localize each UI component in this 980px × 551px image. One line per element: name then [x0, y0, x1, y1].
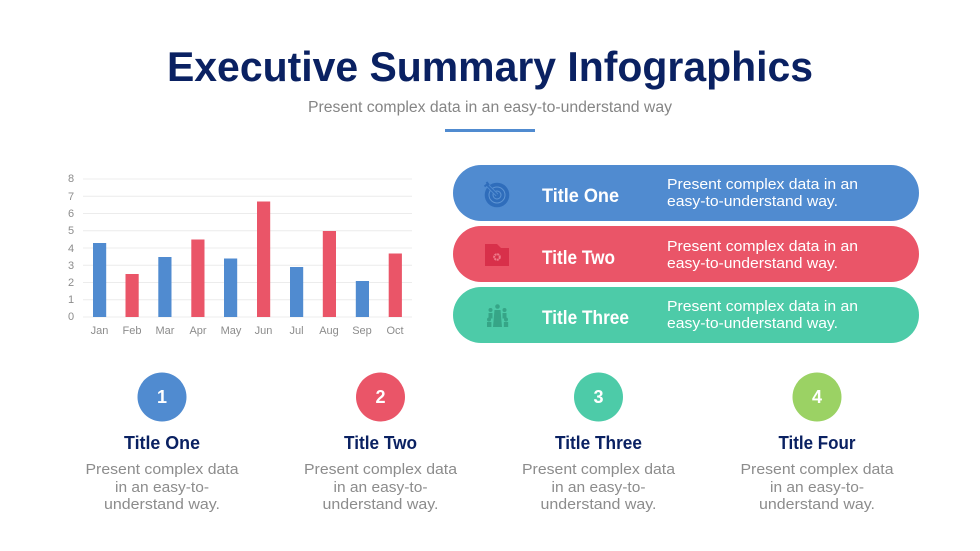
step three text: understand way.: [540, 496, 656, 513]
panel: step three: [522, 372, 676, 513]
step four text: Present complex data: [740, 461, 894, 478]
step two text: in an easy-to-: [334, 479, 428, 496]
number badge 3: 3: [593, 387, 604, 407]
number badge 3: [574, 372, 623, 422]
number badge 4: 4: [812, 387, 822, 407]
x axis labels: Feb: [123, 325, 141, 337]
title underline: [445, 129, 535, 132]
step one text: in an easy-to-: [115, 479, 209, 496]
x axis labels: Aug: [319, 325, 339, 337]
x axis labels: Apr: [189, 325, 207, 337]
step one text: [86, 461, 239, 513]
y axis labels: 1: [68, 294, 74, 306]
title two description: [667, 238, 858, 272]
x axis labels: Mar: [156, 325, 175, 337]
y axis labels: 4: [68, 243, 74, 255]
icon: group of people: [487, 304, 508, 327]
y axis labels: 8: [68, 173, 74, 185]
number badge 1: 1: [157, 387, 167, 407]
y axis labels: 6: [68, 208, 74, 220]
y axis labels: 0: [68, 311, 74, 323]
step four text: understand way.: [759, 496, 875, 513]
x axis labels: Sep: [352, 325, 372, 337]
panel: step one: [86, 372, 239, 513]
step two text: Present complex data: [304, 461, 458, 478]
panel: title two pill: [453, 226, 919, 282]
step three title: Title Three: [555, 433, 642, 453]
title three label: Title Three: [542, 308, 629, 329]
title: Executive Summary Infographics: [167, 43, 813, 90]
x axis labels: Jan: [91, 325, 108, 337]
number badge 2: [356, 372, 405, 422]
step four title: Title Four: [778, 433, 856, 453]
x axis labels: Jul: [289, 325, 304, 337]
title one label: Title One: [542, 186, 619, 207]
step one text: understand way.: [104, 496, 220, 513]
number badge 2: 2: [375, 387, 386, 407]
step three text: [522, 461, 676, 513]
y axis labels: 7: [68, 191, 74, 203]
step four text: [740, 461, 894, 513]
panel: step four: [740, 372, 894, 513]
x axis labels: Oct: [386, 325, 404, 337]
number badge 1: [138, 372, 186, 422]
x axis labels: May: [221, 325, 242, 337]
step one text: Present complex data: [86, 461, 239, 478]
x axis labels: Jun: [255, 325, 272, 337]
step three text: Present complex data: [522, 461, 676, 478]
title two label: Title Two: [542, 248, 615, 269]
title one description: Present complex data in an: [667, 176, 858, 193]
title one description: [667, 176, 858, 210]
x axis labels: [91, 325, 404, 337]
title two description: easy-to-understand way.: [667, 255, 838, 272]
number badge 4: [792, 372, 842, 422]
step two title: Title Two: [344, 433, 417, 453]
y axis labels: 5: [68, 225, 74, 237]
icon: target: [484, 182, 509, 207]
panel: title three pill: [453, 287, 919, 343]
title one description: easy-to-understand way.: [667, 193, 838, 210]
step one title: Title One: [124, 433, 200, 453]
y axis labels: [68, 173, 74, 323]
bars: [93, 202, 402, 317]
subtitle: Present complex data in an easy-to-understand way: [308, 99, 672, 116]
step two text: understand way.: [322, 496, 438, 513]
title two description: Present complex data in an: [667, 238, 858, 255]
icon: folder with gear: [485, 244, 509, 266]
title three description: Present complex data in an: [667, 298, 858, 315]
step two text: [304, 461, 458, 513]
y axis labels: 2: [68, 277, 74, 289]
title three description: [667, 298, 858, 332]
bar chart: [68, 173, 412, 337]
step three text: in an easy-to-: [552, 479, 646, 496]
panel: step two: [304, 372, 458, 513]
panel: title one pill: [453, 165, 919, 221]
title three description: easy-to-understand way.: [667, 315, 838, 332]
y axis labels: 3: [68, 260, 74, 272]
step four text: in an easy-to-: [770, 479, 864, 496]
